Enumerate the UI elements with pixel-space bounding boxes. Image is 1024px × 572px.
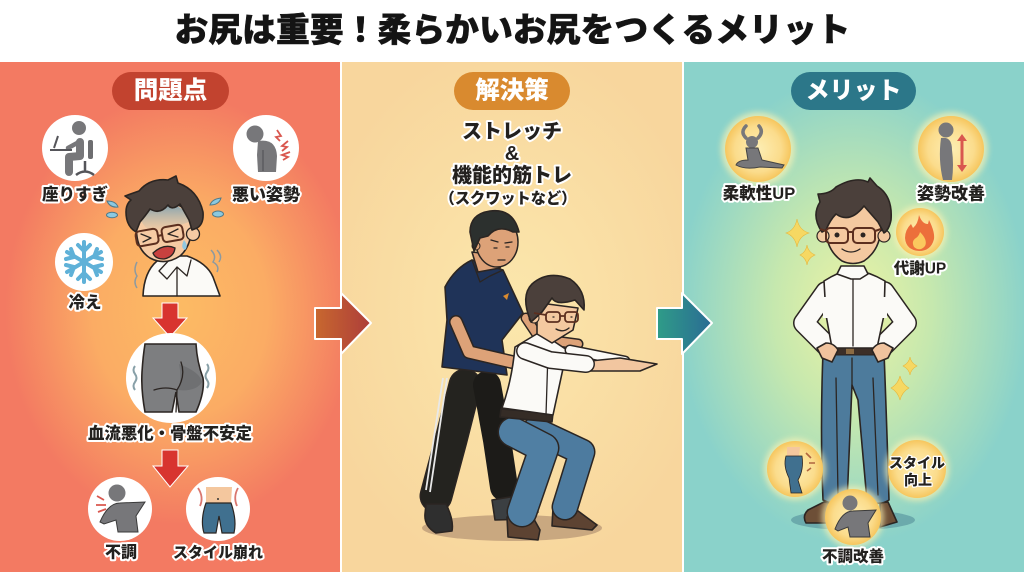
arrow: solution to benefits (657, 293, 712, 354)
heading: problems (112, 72, 229, 110)
label: flexibility up: 柔軟性UP (723, 183, 795, 203)
icon: discomfort improvement (822, 486, 884, 548)
icon: bad posture (233, 115, 299, 181)
icon: cold snowflake (55, 233, 113, 291)
icon: sparkles upper (786, 219, 815, 265)
icon: stiff hip (126, 333, 216, 423)
label: discomfort: 不調 (105, 544, 137, 562)
label: discomfort improvement: 不調改善 (822, 546, 884, 566)
heading: solution (454, 72, 570, 110)
icon: figure loss (186, 477, 250, 541)
label: posture improvement: 姿勢改善 (917, 184, 985, 204)
icon and label: style up: 向上 (904, 472, 932, 488)
icon: flexibility (721, 112, 795, 186)
figure: confident man (791, 178, 915, 530)
label: metabolism up: 代謝UP (894, 258, 946, 278)
panel: problems (0, 62, 340, 572)
label: bad posture: 悪い姿勢 (232, 186, 300, 204)
arrow: problems to solution (315, 293, 371, 354)
panel: benefits (684, 62, 1024, 572)
text: stretch and functional training (440, 120, 576, 208)
icon: discomfort (88, 477, 152, 541)
text: stretch and functional training: & (505, 143, 519, 165)
heading: benefits (791, 72, 916, 110)
label: figure loss: スタイル崩れ (173, 544, 263, 562)
arrow: causes to hip (153, 303, 187, 337)
label: poor circulation and unstable pelvis: 血流悪化・骨盤不安定 (88, 424, 252, 443)
arrow: hip to results (153, 450, 188, 487)
icon: better figure (764, 438, 826, 500)
label: cold: 冷え (68, 293, 102, 312)
figure: squatting man (500, 275, 657, 540)
text: stretch and functional training: （スクワットなど） (440, 190, 576, 208)
icon: sweat drops (106, 198, 224, 218)
icon: sparkles lower (891, 357, 917, 400)
panel: solution (342, 62, 682, 572)
figure: man in discomfort (125, 176, 221, 296)
icon and label: style up: スタイル (889, 455, 945, 471)
text: stretch and functional training: 機能的筋トレ (452, 163, 572, 187)
icon: metabolism flame (893, 205, 947, 259)
figure: trainer and squatting man (422, 211, 657, 541)
icon: sitting too long (42, 115, 108, 181)
figure: trainer (425, 211, 578, 533)
label: sitting too long: 座りすぎ (42, 184, 108, 204)
title: お尻は重要！柔らかいお尻をつくるメリット (174, 12, 850, 50)
heading: problems: 問題点 (134, 76, 207, 104)
heading: solution: 解決策 (475, 76, 549, 104)
icon: posture improvement (914, 112, 988, 186)
icon and label: style up (885, 437, 949, 501)
text: stretch and functional training: ストレッチ (462, 120, 562, 143)
heading: benefits: メリット (806, 78, 902, 104)
